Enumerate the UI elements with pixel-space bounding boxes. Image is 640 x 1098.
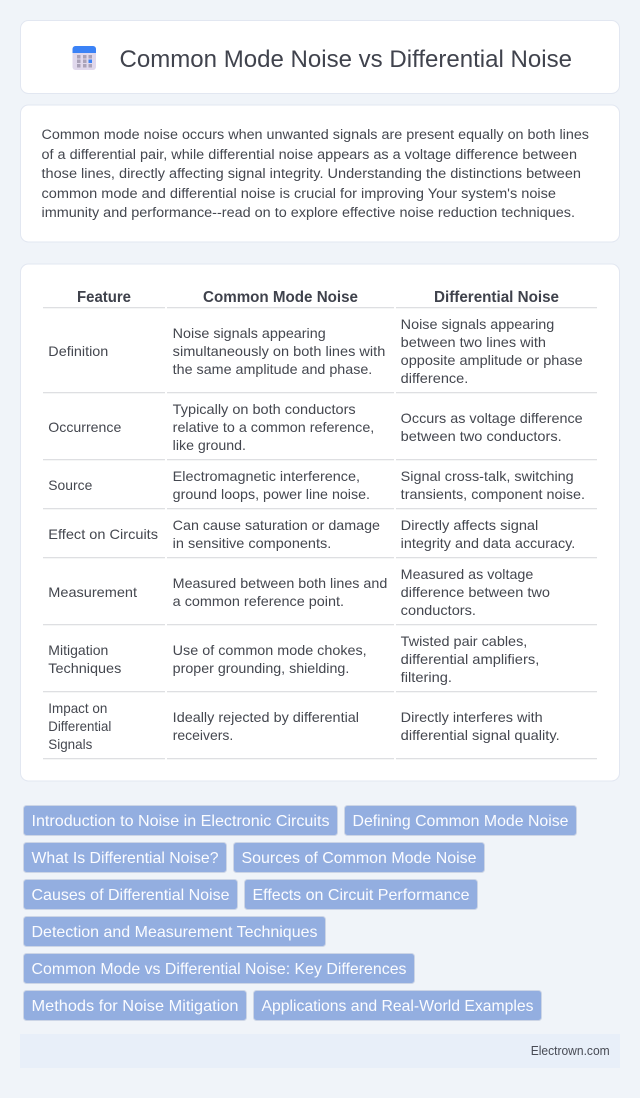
footer: Electrown.com [531,1044,610,1058]
panel: topic tags [24,806,576,1020]
row: measurement: difference between two [401,584,550,600]
row: occurrence: Typically on both conductors [173,401,356,417]
row: impact on differential signals: Impact on [48,700,107,716]
row: measurement [48,566,550,618]
table header: Differential Noise [434,289,559,306]
panel: introduction [20,105,620,242]
row: measurement: Measured between both lines and [173,575,387,591]
row: impact on differential signals: Signals [48,736,92,752]
tag [24,806,338,836]
row: occurrence: relative to a common reference, [173,419,374,435]
tag [24,954,414,984]
row: mitigation techniques [48,633,539,685]
row: effect on circuits: Can cause saturation or damage [173,517,380,533]
tag [24,880,238,910]
tag: Detection and Measurement Techniques [32,924,318,941]
row: occurrence: between two conductors. [401,428,562,444]
tag: Defining Common Mode Noise [352,813,569,830]
table header: Feature [77,289,131,306]
row: mitigation techniques: Twisted pair cables, [401,633,527,649]
row: effect on circuits: Effect on Circuits [48,526,158,542]
row: impact on differential signals [48,700,560,752]
row: mitigation techniques: filtering. [401,669,452,685]
row: measurement: Measured as voltage [401,566,534,582]
row: effect on circuits: integrity and data accuracy. [401,535,575,551]
row: mitigation techniques: Techniques [48,660,121,676]
tag: Introduction to Noise in Electronic Circuits [32,813,330,830]
header card [20,20,620,94]
row: measurement: Measurement [48,584,137,600]
row: source: Source [48,477,93,493]
footer [20,1034,620,1068]
tag [344,806,576,836]
row: definition: opposite amplitude or phase [401,352,583,368]
row: mitigation techniques: Mitigation [48,642,108,658]
table header: Common Mode Noise [203,289,358,306]
row: impact on differential signals: Directly interferes with [401,709,543,725]
tag [24,842,226,872]
row: definition: Definition [48,343,108,359]
row: source [48,468,585,502]
tag: Common Mode vs Differential Noise: Key Differences [32,961,407,978]
tag [234,842,484,872]
row: mitigation techniques: Use of common mode chokes, [173,642,367,658]
row: source: transients, component noise. [401,486,585,502]
icon: calendar grid [72,46,96,70]
row: definition: difference. [401,370,468,386]
row: definition: the same amplitude and phase. [173,361,372,377]
tag: Methods for Noise Mitigation [32,998,238,1015]
tag [24,916,326,946]
tag: Effects on Circuit Performance [252,887,470,904]
row: effect on circuits: in sensitive components. [173,535,331,551]
row: source: Signal cross-talk, switching [401,468,574,484]
intro paragraph: immunity and performance--read on to explore effective noise reduction techniques. [42,205,575,221]
row: occurrence: Occurrence [48,419,122,435]
row: mitigation techniques: differential amplifiers, [401,651,539,667]
row: definition: between two lines with [401,334,546,350]
tag: Applications and Real-World Examples [262,998,534,1015]
tag: Causes of Differential Noise [32,887,230,904]
row: impact on differential signals: Differential [48,718,111,734]
row: impact on differential signals: receivers. [173,727,233,743]
intro paragraph: of a differential pair, while differential noise appears as a voltage difference between [42,147,577,163]
panel: comparison table [20,264,620,781]
row: definition [48,316,583,386]
tag: What Is Differential Noise? [32,850,219,867]
row: measurement: conductors. [401,602,476,618]
row: effect on circuits: Directly affects signal [401,517,538,533]
row: source: Electromagnetic interference, [173,468,360,484]
intro paragraph: Common mode noise occurs when unwanted signals are present equally on both lines [42,127,589,143]
row: measurement: a common reference point. [173,593,344,609]
tag [24,990,246,1020]
intro paragraph: common mode and differential noise is crucial for improving Your system's noise [42,186,556,202]
row: effect on circuits [48,517,575,551]
row: occurrence: Occurs as voltage difference [401,410,583,426]
row: impact on differential signals: differential signal quality. [401,727,560,743]
intro paragraph: those lines, directly affecting signal integrity. Understanding the distinctions between [42,166,581,182]
tag [254,990,542,1020]
title: Common Mode Noise vs Differential Noise [120,46,572,73]
row: mitigation techniques: proper grounding, shielding. [173,660,349,676]
intro paragraph [42,127,589,221]
row: source: ground loops, power line noise. [173,486,370,502]
row: definition: simultaneously on both lines with [173,343,385,359]
row: occurrence: like ground. [173,437,246,453]
table header [77,289,559,306]
row: definition: Noise signals appearing [173,325,326,341]
row: occurrence [48,401,583,453]
tag [244,880,478,910]
row: definition: Noise signals appearing [401,316,554,332]
tag: Sources of Common Mode Noise [242,850,477,867]
row: impact on differential signals: Ideally rejected by differential [173,709,359,725]
